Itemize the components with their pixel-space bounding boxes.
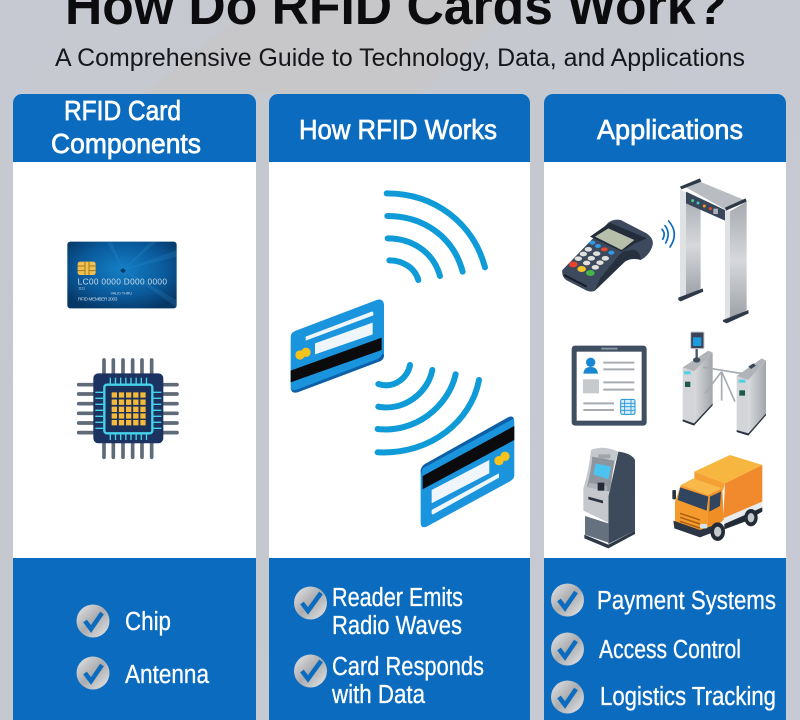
icon: ID document bbox=[572, 346, 647, 426]
icon: radio waves from reader bbox=[387, 193, 485, 280]
icon: ATM bbox=[583, 448, 635, 548]
icon: security gate bbox=[678, 178, 749, 323]
list item: Logistics Tracking: Logistics Tracking bbox=[600, 683, 776, 711]
list item: Card Responds with Data: with Data bbox=[331, 681, 426, 709]
list item: Chip bbox=[76, 604, 171, 638]
list item: Access Control bbox=[551, 632, 741, 666]
list item: Reader Emits Radio Waves bbox=[294, 584, 463, 640]
list item: Reader Emits Radio Waves: Radio Waves bbox=[332, 612, 462, 640]
heading: How RFID Works: How RFID Works bbox=[299, 114, 497, 145]
icon: contactless signal bbox=[662, 221, 674, 247]
icon: credit card: RFID MEMBER 2003 bbox=[78, 297, 118, 302]
panel: how RFID works bbox=[269, 94, 530, 720]
icon: payment terminal bbox=[562, 220, 653, 292]
icon: delivery truck bbox=[672, 455, 762, 541]
icon: credit card: 1111 bbox=[78, 286, 85, 290]
list item: Payment Systems: Payment Systems bbox=[597, 587, 776, 615]
list item: Reader Emits Radio Waves: Reader Emits bbox=[332, 584, 463, 612]
heading: RFID Card Components: Components bbox=[51, 128, 201, 159]
panel footer: components list bbox=[13, 558, 256, 720]
icon: turnstile bbox=[683, 332, 766, 436]
panel footer: steps list bbox=[269, 558, 530, 720]
heading: RFID Card Components bbox=[51, 95, 201, 159]
list item: Antenna bbox=[76, 656, 210, 690]
heading: Applications: Applications bbox=[597, 114, 743, 145]
panel: applications bbox=[544, 94, 786, 720]
icon: responding card bbox=[421, 417, 514, 527]
list item: Card Responds with Data bbox=[294, 653, 484, 709]
icon: microchip bbox=[79, 360, 177, 457]
panel header: applications bbox=[544, 94, 786, 162]
list item: Logistics Tracking bbox=[551, 680, 776, 714]
icon: credit card: VALID THRU bbox=[111, 292, 132, 296]
subtitle: A Comprehensive Guide to Technology, Data, and Applications bbox=[55, 44, 745, 72]
panel header: how it works bbox=[269, 94, 530, 162]
list item: Chip: Chip bbox=[125, 608, 171, 636]
panel: RFID card components bbox=[13, 94, 256, 720]
panel header: components bbox=[13, 94, 256, 162]
heading: RFID Card Components: RFID Card bbox=[64, 95, 181, 126]
list item: Antenna: Antenna bbox=[125, 661, 210, 689]
panel footer: applications list bbox=[544, 558, 786, 720]
icon: radio waves from card bbox=[378, 365, 479, 452]
icon: credit card bbox=[67, 242, 177, 308]
list item: Card Responds with Data: Card Responds bbox=[332, 653, 484, 681]
list item: Access Control: Access Control bbox=[599, 636, 741, 664]
icon: credit card: LC00 0000 D000 0000 bbox=[78, 277, 167, 287]
icon: reader card bbox=[291, 300, 384, 393]
list item: Payment Systems bbox=[551, 584, 776, 616]
